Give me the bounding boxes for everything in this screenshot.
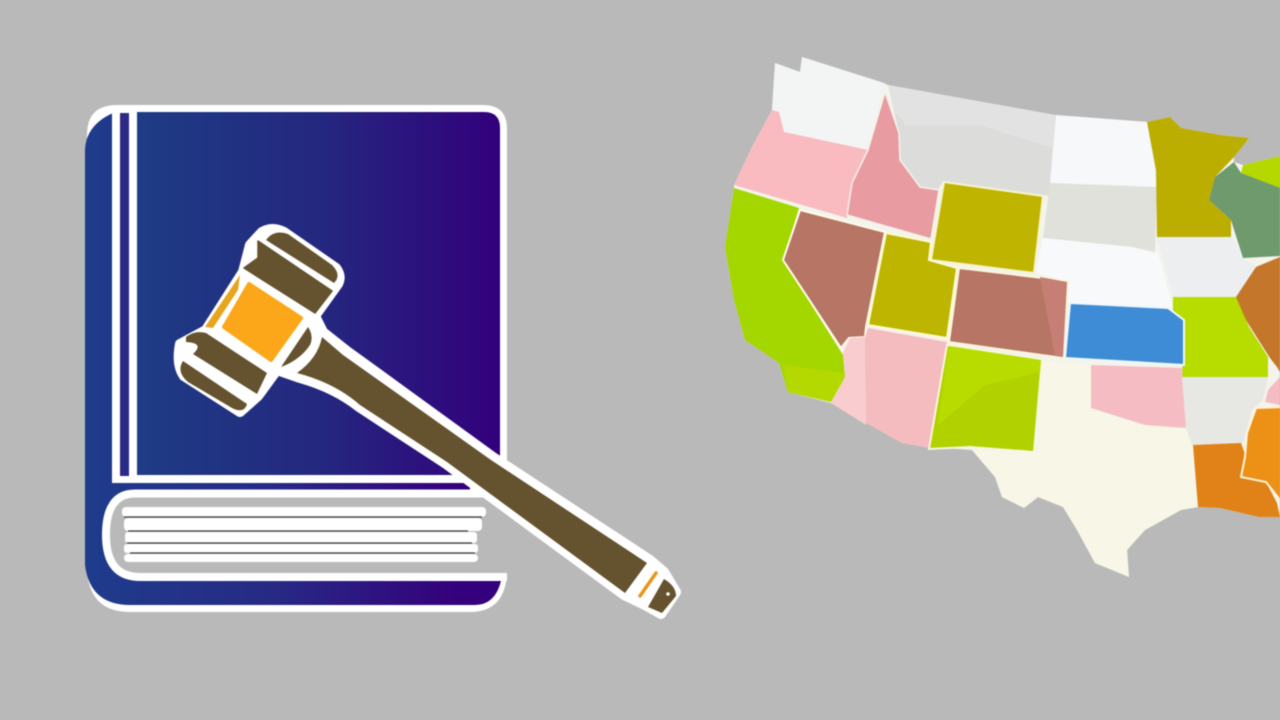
state: North Dakota <box>1050 115 1157 187</box>
state: New Mexico <box>929 345 1042 452</box>
Montana light band <box>888 85 1055 148</box>
gavel handle <box>297 337 647 593</box>
gavel white silhouette <box>179 229 676 614</box>
state: Missouri <box>1173 297 1268 377</box>
state: Wisconsin <box>1209 162 1280 258</box>
gavel upper neck <box>244 241 332 313</box>
state: Illinois <box>1234 257 1280 372</box>
state: Louisiana <box>1193 443 1280 517</box>
state: Arkansas <box>1182 377 1268 445</box>
state: Kentucky fragment <box>1265 377 1280 405</box>
Colorado light wedge <box>1040 277 1067 357</box>
state: Washington <box>772 57 884 150</box>
gavel orange shade <box>205 275 240 328</box>
gavel orange band <box>224 284 301 360</box>
icon: law book <box>85 105 510 612</box>
map underlay <box>725 57 1280 577</box>
state: Mississippi <box>1241 407 1280 505</box>
gavel upper cap <box>266 232 338 283</box>
state: Oklahoma <box>1091 365 1186 428</box>
state: Idaho <box>847 92 939 239</box>
state: Nevada <box>783 210 885 348</box>
state: South Dakota <box>1043 183 1157 252</box>
book pages block <box>106 490 510 577</box>
gavel collar <box>281 327 312 367</box>
book spine and lower cover <box>85 113 501 605</box>
book front cover <box>137 112 500 475</box>
state: Michigan <box>1241 156 1280 188</box>
California lower shade <box>783 365 845 402</box>
Arizona light edge <box>831 337 866 425</box>
state: Iowa <box>1157 237 1256 297</box>
state: Minnesota <box>1147 117 1249 237</box>
state: Utah <box>868 233 957 338</box>
map: United States <box>725 57 1280 577</box>
gavel lower neck <box>186 332 267 394</box>
state: Wyoming <box>931 182 1043 273</box>
gavel end cap <box>648 579 676 613</box>
gavel handle orange ring <box>640 573 656 596</box>
state: Colorado <box>949 268 1068 358</box>
state: California <box>725 188 845 402</box>
state: Texas <box>972 361 1198 577</box>
icon: gavel <box>179 229 676 614</box>
state: Arizona <box>831 328 947 448</box>
state: Kansas <box>1065 303 1184 365</box>
state: Nebraska <box>1036 238 1173 308</box>
gavel lower cap <box>180 361 247 410</box>
state: Oregon <box>734 110 868 218</box>
state: Montana <box>888 85 1056 196</box>
New Mexico light shade <box>938 346 1041 425</box>
